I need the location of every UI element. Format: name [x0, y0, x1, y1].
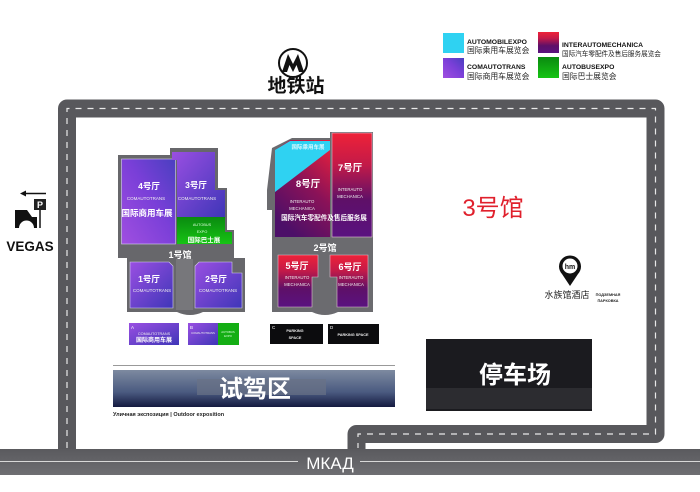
panel: room 6: INTERAUTO — [339, 275, 364, 280]
hotel marker — [544, 255, 621, 303]
legend: interautomechanica: INTERAUTOMECHANICA — [562, 42, 643, 49]
panel: hall 4: COMAUTOTRANS — [127, 196, 165, 201]
hall 3 label: 3号馆 — [462, 195, 524, 222]
panel: hall 2 building — [267, 132, 373, 315]
panel: parking lot: 停车场 — [479, 362, 551, 389]
panel: hall 7 — [332, 133, 372, 237]
panel: hall 3: 3号厅 — [185, 180, 207, 190]
panel: room 2: 2号厅 — [205, 274, 227, 284]
legend: interautomechanica — [538, 32, 661, 58]
legend: automobil expo: AUTOMOBILEXPO — [467, 39, 527, 46]
outdoor block B — [188, 323, 239, 345]
legend: autobusexpo: AUTOBUSEXPO — [562, 64, 614, 71]
arrow — [20, 190, 46, 196]
outdoor block D: D — [330, 325, 334, 330]
panel: hall 8: MECHANICA — [289, 206, 315, 211]
interauto banner text: 国际汽车零配件及售后服务展 — [281, 213, 367, 222]
icon: metro — [279, 49, 307, 77]
panel: room 6 — [330, 255, 368, 307]
icon: parking sign: P — [37, 200, 43, 210]
outdoor exposition caption: Уличная экспозиция | Outdoor exposition — [113, 412, 225, 418]
panel: automobil expo area — [275, 141, 330, 192]
outdoor block C: SPACE — [289, 336, 302, 340]
hall 1 label: 1号馆 — [168, 249, 192, 260]
panel: room 6: MECHANICA — [338, 282, 364, 287]
road: MKAD — [0, 449, 700, 475]
hall 2 label: 2号馆 — [313, 242, 337, 253]
panel: test drive area — [113, 365, 395, 407]
outdoor block A: COMAUTOTRANS — [138, 332, 171, 336]
Vegas label: VEGAS — [6, 239, 54, 254]
outdoor block B: EXPO — [224, 334, 233, 338]
road: access loop — [67, 108, 656, 452]
icon: car — [15, 210, 37, 228]
panel: automobil expo area: 国际乘用车展 — [291, 143, 325, 151]
panel: autobus expo area: AUTOBUS — [193, 223, 212, 227]
legend: automobil expo: 国际乘用车展览会 — [467, 45, 530, 55]
panel: hall 4 — [121, 159, 176, 244]
outdoor block D — [328, 324, 379, 344]
panel: autobus expo area: 国际巴士展 — [188, 235, 221, 244]
legend: comautotrans: 国际商用车展览会 — [467, 71, 530, 81]
panel: hall 7: 7号厅 — [338, 163, 363, 174]
panel: test drive area: 试驾区 — [219, 376, 291, 403]
legend: autobusexpo — [538, 57, 617, 81]
outdoor block B: AUTOBUS — [221, 330, 235, 334]
legend: autobusexpo: 国际巴士展览会 — [562, 71, 617, 81]
MKAD label: МКАД — [306, 454, 354, 473]
panel: hall 8 — [275, 140, 330, 237]
panel: room 6: 6号厅 — [338, 262, 362, 272]
panel: hall 1 building — [118, 148, 245, 315]
legend — [443, 32, 661, 81]
panel: hall 8: 8号厅 — [296, 179, 321, 190]
panel: room 5: 5号厅 — [285, 261, 309, 271]
panel: hall 4: 国际商用车展 — [121, 208, 173, 218]
hotel label: 水族馆酒店 — [544, 289, 590, 300]
outdoor block C: PARKING — [286, 329, 304, 333]
panel: room 1: 1号厅 — [138, 274, 160, 284]
Vegas parking marker — [6, 190, 54, 254]
legend: comautotrans — [443, 58, 530, 81]
outdoor block A: 国际商用车展 — [136, 336, 172, 344]
metro label: 地铁站 — [267, 75, 325, 97]
panel: hall 3: COMAUTOTRANS — [178, 196, 216, 201]
panel: hall 7: MECHANICA — [337, 194, 363, 199]
panel: room 5: MECHANICA — [284, 282, 310, 287]
outdoor block B: COMAUTOTRANS — [191, 331, 215, 335]
panel: hall 3 — [172, 152, 225, 217]
panel: hall 8: INTERAUTO — [290, 199, 315, 204]
panel: room 2: COMAUTOTRANS — [199, 288, 237, 293]
outdoor block A — [129, 323, 179, 345]
panel: room 5: INTERAUTO — [285, 275, 310, 280]
outdoor block C — [270, 324, 323, 344]
outdoor block D: PARKING SPACE — [337, 333, 369, 337]
legend: comautotrans: COMAUTOTRANS — [467, 64, 526, 71]
panel: room 1: COMAUTOTRANS — [133, 288, 171, 293]
panel: autobus expo area: EXPO — [197, 230, 207, 234]
underground parking label: ПОДЗЕМНАЯ — [596, 293, 621, 297]
panel: hall 7: INTERAUTO — [338, 187, 363, 192]
outdoor block A: A — [131, 325, 134, 330]
panel: autobus expo area — [177, 217, 232, 244]
hotel marker: ПАРКОВКА — [597, 299, 619, 303]
panel: parking lot — [426, 339, 592, 411]
legend: interautomechanica: 国际汽车零配件及售后服务展览会 — [562, 49, 661, 58]
panel: room 1 — [130, 262, 173, 308]
outdoor block B: B — [190, 325, 193, 330]
icon: location pin: hm — [565, 264, 575, 271]
outdoor block C: C — [272, 325, 276, 330]
panel: room 2 — [195, 262, 242, 308]
panel: room 5 — [278, 255, 318, 307]
panel: hall 4: 4号厅 — [138, 181, 160, 191]
legend: automobil expo — [443, 33, 530, 55]
metro station marker — [267, 49, 325, 97]
